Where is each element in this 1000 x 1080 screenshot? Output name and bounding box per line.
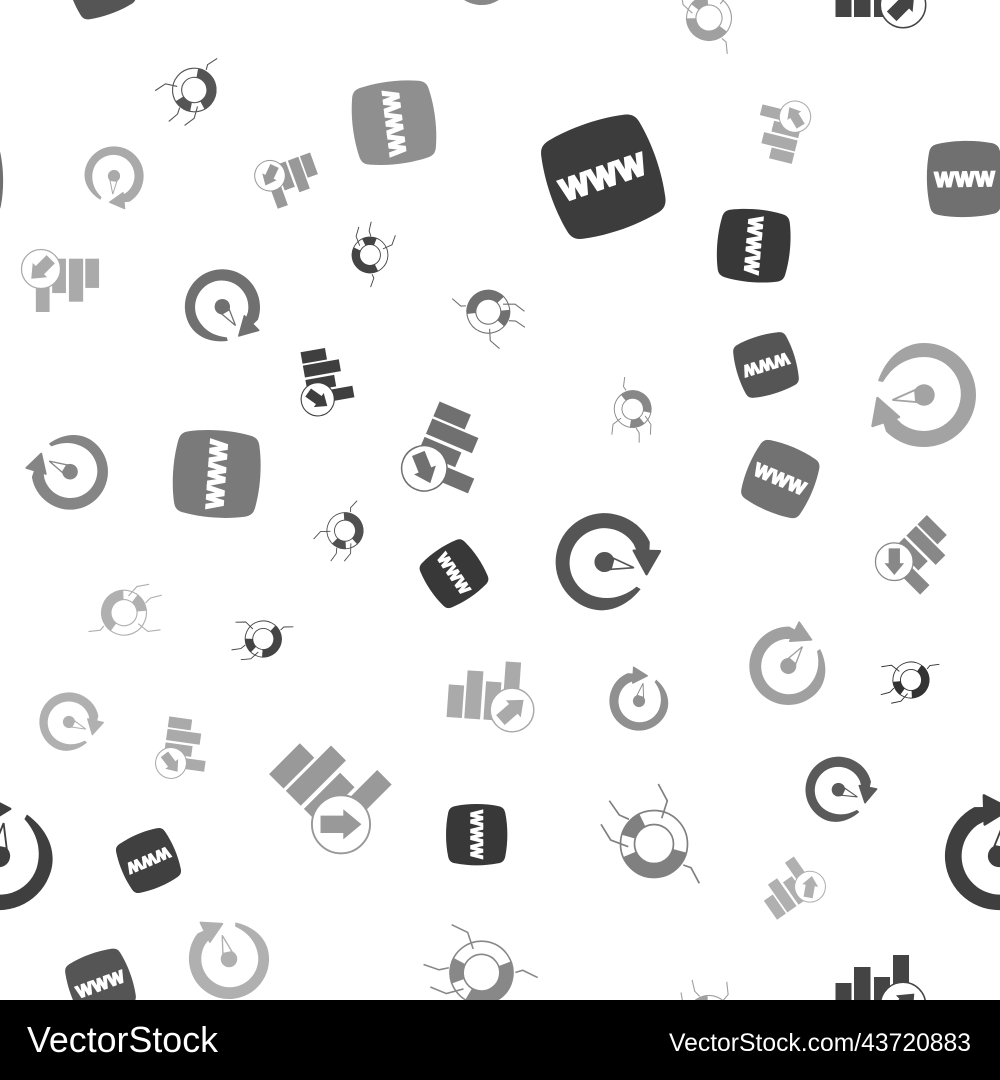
icon: www badge, grey vertical left: WWW [203, 439, 233, 510]
icon: virus ring 11, bottom [408, 902, 538, 1032]
icon: www badge, grey rotated top: WWW [378, 88, 411, 157]
icon: www badge, grey vertical left [170, 427, 263, 521]
icon: gauge 11 [184, 915, 274, 1004]
icon: virus ring 8 [221, 602, 293, 674]
icon: gauge 6 [733, 611, 843, 721]
icon: virus ring 3 [452, 276, 534, 358]
icon: gauge 5 [872, 343, 976, 447]
icon: www badge, right edge [926, 140, 1000, 218]
icon: bar chart 3 [21, 249, 99, 312]
icon: www badge, bottom left [60, 944, 141, 1024]
icon: www badge, dark diagonal: WWW [433, 551, 473, 598]
icon: www badge, lower left upside down [111, 823, 186, 898]
icon: bar chart 2 [250, 146, 324, 213]
icon: www badge, dark vertical [714, 206, 793, 285]
icon: bar chart 4 [750, 93, 814, 166]
icon: www badge, lower centre vertical [446, 804, 507, 865]
icon: www badge, left edge wrap [0, 140, 4, 218]
icon: www badge, lower left upside down: WWW [124, 843, 172, 876]
icon: virus ring 7 [89, 570, 174, 655]
icon: virus ring 4, bottom wrap [666, 967, 752, 1054]
icon: virus ring 11, top wrap [408, 0, 538, 32]
icon: virus ring 1 [153, 58, 223, 128]
icon: bar chart 5 [293, 344, 357, 418]
icon: bar chart 9 [259, 718, 407, 865]
icon: bar chart 1, top right wrap [836, 0, 926, 28]
icon: www badge, lower centre vertical: WWW [467, 810, 486, 859]
icon: virus ring 2 [335, 212, 410, 287]
icon: bar chart 10 [154, 715, 211, 783]
icon: bar chart 7 [868, 509, 963, 604]
icon: bar chart 11 [753, 850, 831, 926]
icon: gauge 10, left edge wrap [0, 789, 66, 924]
icon: www badge, large dark: WWW [556, 148, 651, 208]
icon: gauge 1 [79, 140, 150, 211]
icon: www badge, upside down: WWW [740, 349, 791, 380]
icon: virus ring 5 [593, 377, 669, 453]
icon: gauge 7 [600, 663, 677, 740]
icon: gauge 3 [17, 419, 123, 525]
footer watermark bar [0, 1000, 1000, 1080]
icon: bar chart 1, bottom right [836, 955, 926, 1028]
image reference url: VectorStock.com/43720883 [669, 1029, 971, 1057]
icon: gauge 4 [542, 499, 667, 624]
icon: www badge, dark vertical: WWW [739, 216, 766, 275]
icon: virus ring 6 [306, 501, 374, 568]
icon: www badge, bottom left: WWW [74, 967, 128, 1002]
icon: bar chart 8 [446, 658, 537, 733]
brand name: VectorStock [27, 1019, 219, 1060]
icon: virus ring 4, top [666, 0, 752, 54]
icon: www badge, large dark [532, 106, 674, 248]
icon: bar chart 6 [395, 397, 497, 509]
icon: www badge, grey rotated top [348, 77, 440, 169]
icon: www badge, right edge: WWW [934, 168, 996, 192]
icon: gauge 8 [28, 681, 110, 763]
icon: gauge 2 [172, 257, 272, 356]
icon: gauge 9 [793, 745, 883, 835]
icon: www badge, mid grey tilted [735, 434, 825, 524]
icon: www badge, top left wrap [60, 0, 141, 24]
icon: virus ring 9 [871, 646, 939, 714]
icon: www badge, mid grey tilted: WWW [751, 459, 809, 499]
icon: www badge, dark diagonal [414, 534, 494, 614]
icon: virus ring 10 [601, 784, 699, 883]
icon: www badge, upside down [729, 328, 803, 402]
icon: gauge 10, right edge [931, 789, 1000, 924]
